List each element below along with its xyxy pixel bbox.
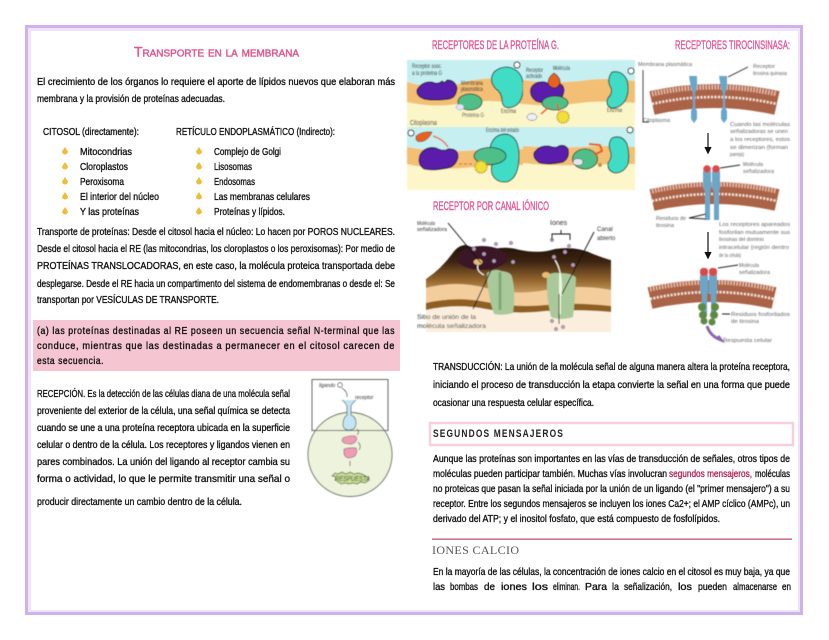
list: citosol: El interior del núcleo (80, 191, 159, 203)
list: reticulo endoplasmatico (176, 125, 335, 218)
reception diagram: RESPUESTA (335, 476, 370, 483)
list: reticulo endoplasmatico: Las membranas celulares (214, 191, 310, 203)
G protein illustration (407, 60, 635, 190)
heading: receptor por canal ionico: RECEPTOR POR CANAL IÓNICO (433, 200, 549, 213)
list: reticulo endoplasmatico: Endosomas (214, 176, 255, 188)
calcium paragraph: señalización, (624, 581, 672, 593)
protein transport paragraph (37, 226, 395, 306)
calcium paragraph: iones (501, 581, 527, 593)
tyrosine kinase stage 2: de la célula) (719, 253, 741, 259)
panel 2: Enzima (607, 108, 622, 114)
panel 3 (407, 127, 523, 190)
reception paragraph (37, 387, 290, 508)
list: reticulo endoplasmatico: RETÍCULO ENDOPLASMÁTICO (Indirecto): (176, 125, 335, 138)
pink callout: (a) las proteínas destinadas al RE poseen un secuencia señal N-terminal que las (37, 325, 395, 337)
ion channel illustration: señalizadora (417, 227, 447, 233)
list: citosol (43, 126, 159, 218)
red rule (432, 538, 792, 540)
protein transport paragraph: Desde el citosol hacia el RE (las mitocondrias, los cloroplastos o los peroxisomas): Por medio de (37, 243, 395, 255)
tyrosine kinase stage 1: Citoplasma (643, 118, 671, 124)
tyrosine kinase stage 2: tirosinas del dominio (719, 237, 764, 243)
reception diagram: receptor (355, 395, 374, 401)
tyrosine kinase stage 1: pareja) (730, 152, 744, 158)
calcium paragraph (433, 566, 791, 593)
tyrosine kinase stage 1: a los receptores, estos (730, 137, 790, 143)
reception paragraph: forma o actividad, lo que le permite transmitir una señal o (37, 473, 290, 485)
intro paragraph: membrana y la provisión de proteínas adecuadas. (37, 93, 225, 105)
protein transport paragraph: PROTEÍNAS TRANSLOCADORAS, en este caso, la molécula proteica transportada debe (37, 259, 395, 272)
tyrosine kinase stage 2: Molécula (743, 162, 764, 168)
tyrosine kinase stage 1: Receptor (753, 64, 775, 70)
tyrosine kinase stage 2: Residuos de (656, 216, 686, 222)
tyrosine kinase stage 3: señalizadora (739, 270, 771, 276)
list bullets: reticulo (196, 147, 202, 214)
tyrosine kinase stage 1 (638, 62, 790, 158)
heading: iones calcio: IONES CALCIO (432, 543, 519, 557)
tyrosine kinase stage 3: Residuos fosforilados (731, 312, 790, 318)
second messengers paragraph: segundos mensajeros, (669, 468, 752, 480)
list: citosol: Y las proteínas (80, 206, 139, 218)
calcium paragraph: pueden (698, 581, 727, 593)
tyrosine kinase stage 2: Los receptores apareados (719, 222, 790, 228)
panel 1: plasmática (461, 87, 484, 93)
intro paragraph: El crecimiento de los órganos lo requiere el aporte de lípidos nuevos que elaboran más (37, 76, 395, 88)
tyrosine kinase stage 1: se dimerizan (forman (730, 145, 788, 151)
pink callout (33, 320, 400, 371)
panel 1: a la proteína G (412, 71, 442, 77)
list bullets: citosol (62, 147, 68, 214)
reception paragraph: RECEPCIÓN. Es la detección de las células diana de una molécula señal (37, 387, 290, 400)
calcium paragraph: eliminan. (553, 581, 580, 593)
title: Transporte en la membrana (134, 44, 299, 60)
panel 2: activado (526, 74, 542, 80)
tyrosine kinase stage 3: de tirosina (731, 319, 760, 325)
pink callout: conduce, mientras que las destinadas a permanecer en el citosol carecen de (37, 340, 395, 352)
reception diagram: ligando (319, 383, 335, 389)
list: reticulo endoplasmatico: Lisosomas (214, 161, 252, 173)
panel 1: Enzima (501, 109, 516, 115)
tyrosine kinase stage 1: tirosina quinasa (753, 71, 788, 77)
calcium paragraph: las (433, 581, 445, 593)
tyrosine kinase stage 2: tirosina (656, 223, 675, 229)
second messengers paragraph: moléculas pueden participar también. Muchas vías involucran (433, 468, 667, 480)
tyrosine kinase stage 3: Molécula (739, 263, 760, 269)
panel 2 (523, 60, 635, 127)
list: reticulo endoplasmatico: Proteínas y lípidos. (214, 206, 285, 218)
panel 1: Receptor asoc. (412, 64, 442, 70)
tyrosine kinase stage 2: fosforilan mutuamente sus (719, 230, 790, 236)
tyrosine kinase stage 1: Cuando las moléculas (730, 122, 790, 128)
list: citosol: Cloroplastos (80, 161, 128, 173)
section heading: segundos mensajeros: SEGUNDOS MENSAJEROS (433, 428, 564, 440)
list: reticulo endoplasmatico: Complejo de Golgi (214, 146, 281, 158)
panel 1 (407, 60, 523, 127)
calcium paragraph: almacenarse (733, 581, 777, 593)
list: citosol: Mitocondrias (80, 146, 132, 158)
heading: receptores de la proteina G: RECEPTORES DE LA PROTEÍNA G. (432, 39, 559, 52)
calcium paragraph: bombas (450, 581, 478, 593)
tyrosine kinase stage 2: intracelular (región dentro (719, 245, 789, 251)
list: citosol: CITOSOL (directamente): (43, 126, 139, 138)
calcium paragraph: Para (585, 581, 607, 593)
arrow down 2 (705, 232, 711, 258)
ion channel illustration: Iones (550, 220, 568, 227)
arrow down 1 (705, 133, 711, 153)
ion channel illustration: Canal (597, 227, 613, 233)
second messengers paragraph: moléculas (755, 468, 790, 480)
ion channel illustration: molécula señalizadora (417, 324, 487, 330)
panel 4 (523, 127, 635, 190)
reception paragraph: cuando se une a una proteína receptora ubicada en la superficie (37, 422, 290, 434)
calcium paragraph: los (532, 581, 548, 593)
panel 2: Receptor (526, 68, 543, 74)
ion channel illustration (417, 220, 616, 332)
reception paragraph: celular o dentro de la célula. Los receptores y ligandos vienen en (37, 439, 290, 451)
pink callout: esta secuencia. (37, 355, 104, 367)
second messengers paragraph (433, 453, 790, 525)
list: citosol: Peroxisoma (80, 176, 124, 188)
calcium paragraph: en (782, 581, 791, 593)
panel 1: Citoplasma (410, 120, 437, 127)
protein transport paragraph: desplegarse. Desde el RE hacia un compartimento del sistema de endomembranas o desde el: Se (37, 278, 395, 290)
calcium paragraph: la (612, 581, 619, 593)
calcium paragraph: de (484, 581, 495, 593)
ion channel illustration: abierto (597, 236, 616, 242)
ion channel illustration: Molécula (417, 221, 435, 227)
transduction paragraph: ocasionar una respuesta celular específica. (433, 397, 594, 409)
reception diagram (308, 380, 392, 496)
tyrosine kinase stage 1: Membrana plasmática (638, 62, 693, 68)
tyrosine kinase stage 1: señalizadoras se unen (730, 129, 788, 135)
tyrosine kinase stage 3 (650, 263, 790, 344)
protein transport paragraph: Transporte de proteínas: Desde el citosol hacia el núcleo: Lo hacen por POROS NUCLEARES. (37, 226, 395, 238)
panel 3: Enzima del estado (486, 128, 519, 134)
section heading: segundos mensajeros (430, 423, 793, 445)
reception paragraph: producir directamente un cambio dentro de la célula. (37, 496, 242, 508)
panel 1: Proteína G (462, 113, 484, 119)
protein transport paragraph: transportan por VESÍCULAS DE TRANSPORTE. (37, 293, 219, 306)
ion channel illustration: Sitio de unión de la (417, 315, 477, 321)
reception paragraph: pares combinados. La unión del ligando al receptor cambia su (37, 456, 290, 468)
tyrosine kinase stage 2 (652, 162, 790, 259)
panel 2: Molécula (553, 66, 570, 72)
intro paragraph (37, 76, 395, 105)
transduction paragraph (433, 360, 790, 409)
tyrosine kinase stage 2: señalizadora (743, 169, 775, 175)
second messengers paragraph: derivado del ATP; y el inositol fosfato, que está compuesto de fosfolípidos. (433, 513, 720, 525)
tyrosine kinase stage 3: Respuesta celular (723, 338, 772, 344)
calcium paragraph: los (678, 581, 692, 593)
reception paragraph: proveniente del exterior de la célula, una señal química se detecta (37, 405, 290, 417)
panel 1: Membrana (461, 81, 484, 87)
